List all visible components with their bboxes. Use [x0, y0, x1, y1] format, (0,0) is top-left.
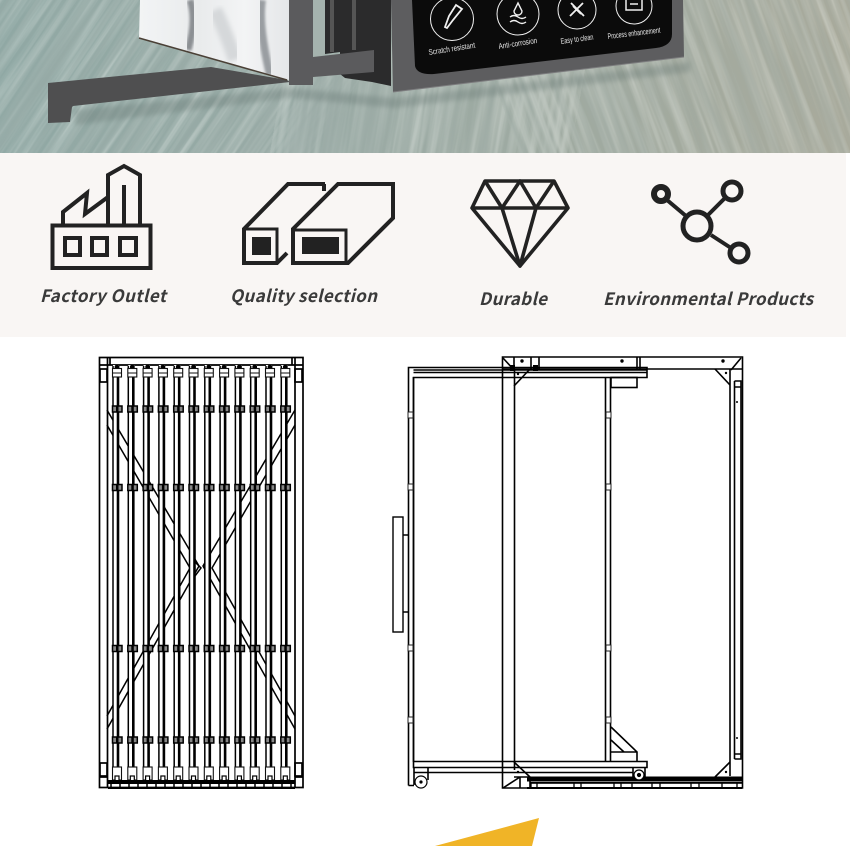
technical drawing: side view — [393, 357, 742, 788]
product panel black screen — [412, 0, 672, 74]
marble panel — [139, 0, 290, 80]
yellow arrow fragment — [435, 818, 539, 846]
icon: factory — [52, 166, 150, 268]
label: Factory Outlet: Factory Outlet — [40, 282, 168, 307]
foot of the stand — [48, 67, 290, 123]
rear frame — [408, 368, 647, 786]
icon: rectangular steel tubes — [244, 184, 393, 263]
cross bracing — [107, 410, 295, 729]
base channel — [108, 780, 295, 788]
label: Durable: Durable — [479, 285, 549, 310]
floor seen through the stand — [313, 0, 325, 57]
feature circle icons — [430, 0, 652, 40]
photo: showroom floor with display stand — [0, 0, 850, 153]
outer frame — [100, 358, 303, 788]
feature captions: Easy to clean — [560, 32, 594, 46]
mechanism behind panel — [325, 0, 391, 86]
label: Quality selection: Quality selection — [230, 282, 378, 307]
vertical rails with clips — [112, 365, 290, 782]
front frame — [502, 357, 742, 788]
post clips — [408, 412, 611, 723]
feature captions: Scratch resistant — [428, 41, 476, 57]
label: Environmental Products: Environmental Products — [603, 285, 815, 310]
marble veins — [188, 0, 270, 75]
wood grain texture — [0, 0, 850, 153]
icon: connected nodes — [654, 182, 748, 262]
feature captions — [428, 26, 661, 57]
frame fixing dots — [510, 359, 738, 773]
stand shadows — [75, 62, 690, 125]
handle — [393, 517, 408, 632]
feature captions: Process enhancement — [607, 26, 661, 41]
feature captions: Anti-corrosion — [498, 36, 538, 51]
panel: product advantages band — [0, 153, 846, 337]
technical drawing: front view — [100, 358, 303, 788]
product panel frame — [391, 0, 684, 92]
base channel — [527, 776, 742, 788]
caster wheels — [415, 770, 644, 788]
stand post and bracket — [289, 0, 374, 85]
icon: diamond — [472, 181, 568, 266]
